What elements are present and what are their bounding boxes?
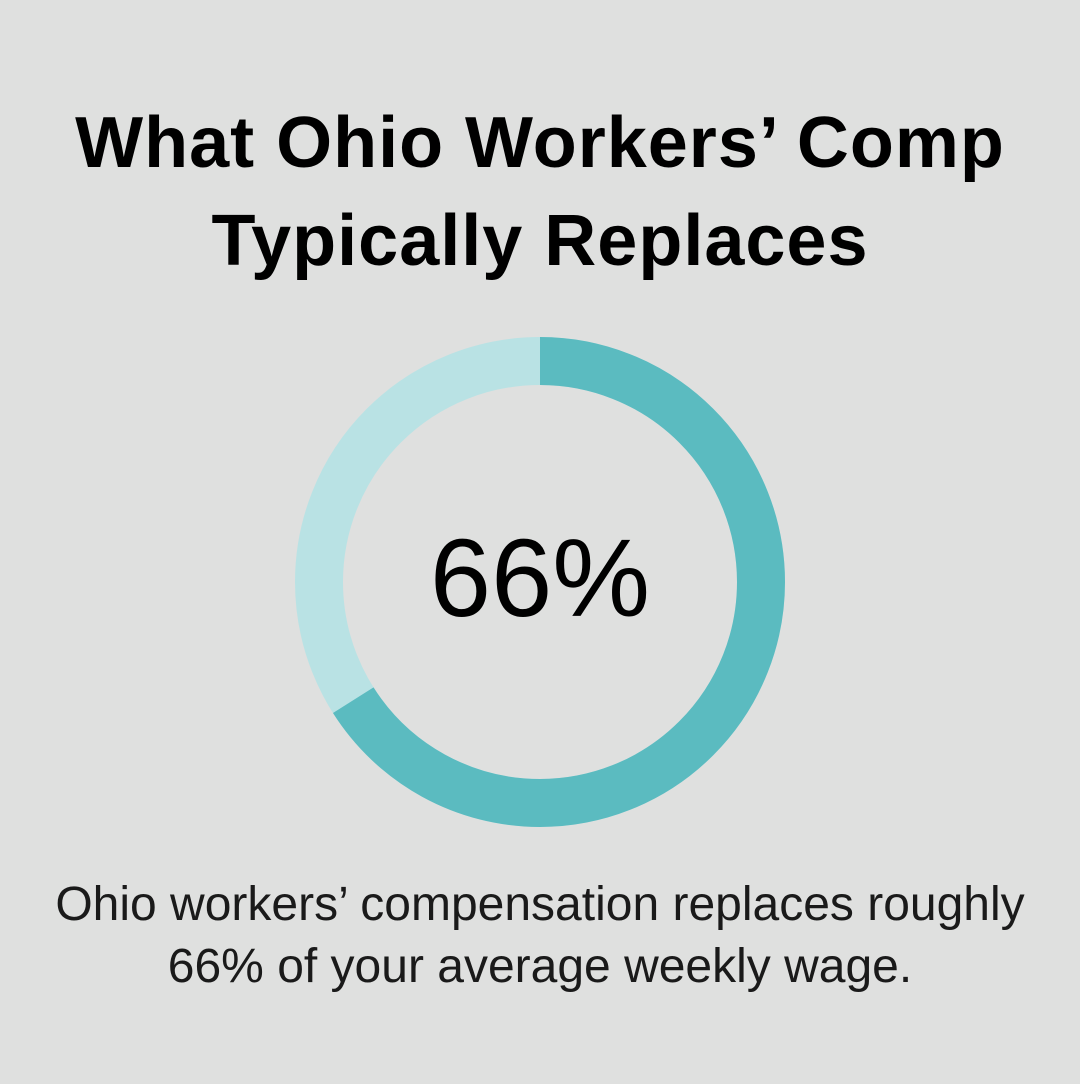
center value: 66% (430, 517, 650, 640)
caption: 66% of your average weekly wage. (168, 940, 912, 993)
caption (55, 878, 1025, 993)
donut arc 66% (319, 361, 761, 803)
donut track (remaining 34%) (319, 361, 761, 803)
caption: Ohio workers’ compensation replaces roughly (55, 878, 1025, 931)
title (75, 103, 1005, 281)
title: Typically Replaces (212, 201, 868, 281)
title: What Ohio Workers’ Comp (75, 103, 1005, 183)
